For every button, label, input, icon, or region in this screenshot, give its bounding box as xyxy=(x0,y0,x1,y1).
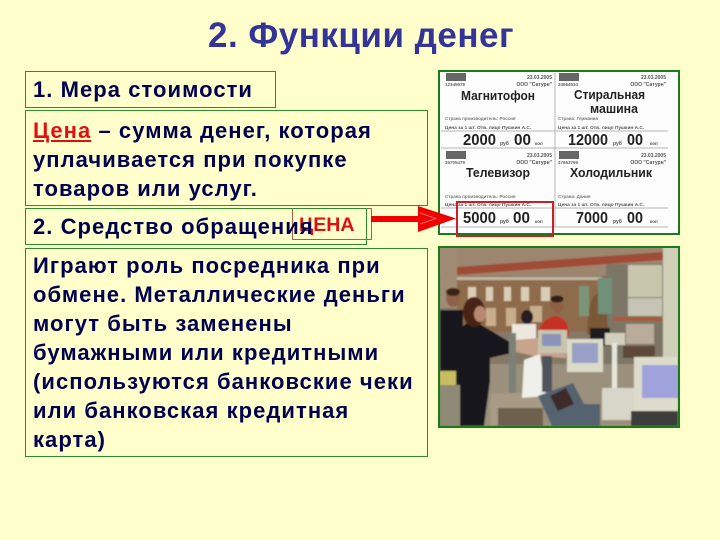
price tag: washing machine: 12000 xyxy=(568,132,608,149)
price tag: television xyxy=(445,151,553,227)
panel: store checkout photo xyxy=(438,246,680,428)
price tag: refrigerator: 00 xyxy=(627,210,643,227)
floor and counter xyxy=(484,364,678,426)
price tag: tape recorder: 23.03.2005 xyxy=(527,75,552,81)
arrow: to price xyxy=(371,206,456,232)
price tag: refrigerator: Страна: Дания xyxy=(558,194,591,199)
price tag: refrigerator: 47653765 xyxy=(558,160,579,165)
price tag: washing machine: коп xyxy=(650,141,658,146)
title: 2. Функции денег xyxy=(208,16,514,55)
price tag: tape recorder: ООО "Сатурн" xyxy=(516,82,553,88)
panel: medium of exchange description xyxy=(25,248,428,457)
price tag: tape recorder: Магнитофон xyxy=(461,88,535,103)
equipment xyxy=(598,278,612,314)
label: price tag word xyxy=(292,208,372,240)
price tag: tape recorder: 12345678 xyxy=(445,82,466,87)
price tag: washing machine: ООО "Сатурн" xyxy=(630,82,667,88)
price tag: tape recorder: Цена за 1 шт. Отв. лицо Пушкин А.С. xyxy=(445,125,531,131)
price tag: washing machine: 00 xyxy=(627,132,643,149)
price tag: tape recorder: руб xyxy=(500,140,509,147)
panel: medium of exchange description: могут быть заменены xyxy=(33,311,293,336)
monitors xyxy=(538,330,567,353)
price tag: washing machine xyxy=(558,73,667,149)
price tag: television: Страна производитель: Россия xyxy=(445,194,516,199)
price tag: washing machine: Стиральная xyxy=(574,87,645,102)
price tag: refrigerator: коп xyxy=(650,219,658,224)
price tag: tape recorder: 00 xyxy=(514,132,531,149)
label: price tag word: ЦЕНА xyxy=(299,214,354,236)
panel: medium of exchange description: Играют роль посредника при xyxy=(33,253,381,278)
price tag: refrigerator: ООО "Сатурн" xyxy=(630,160,667,166)
highlight: price rectangle xyxy=(456,201,554,237)
back wall xyxy=(606,264,663,348)
panel: medium of exchange heading xyxy=(25,208,367,245)
price tag: television: Телевизор xyxy=(466,165,530,180)
price tag: washing machine: машина xyxy=(590,101,639,116)
price tag: tape recorder: 2000 xyxy=(463,132,496,149)
price tag: television: 23.03.2005 xyxy=(527,153,552,159)
price tag: washing machine: руб xyxy=(613,140,622,147)
price tag: refrigerator: 7000 xyxy=(576,210,608,227)
price tag: refrigerator: 23.03.2005 xyxy=(641,153,666,159)
price tag: washing machine: Цена за 1 шт. Отв. лицо Пушкин А.С. xyxy=(558,125,644,131)
price tag: television: 5000 xyxy=(463,210,496,227)
panel: price definition xyxy=(25,110,428,206)
price tag: washing machine: Страна: Германия xyxy=(558,116,598,121)
panel: price tags image xyxy=(438,70,680,235)
panel: price definition: Цена – сумма денег, которая xyxy=(33,118,372,143)
price tag: television: руб xyxy=(500,218,509,225)
panel: medium of exchange description: карта) xyxy=(33,427,106,452)
price tag: refrigerator: Холодильник xyxy=(570,165,652,180)
panel: medium of exchange description: или банковская кредитная xyxy=(33,398,349,423)
panel: measure of value heading xyxy=(25,71,276,108)
price tag: television: коп xyxy=(535,219,543,224)
panel: medium of exchange description: обмене. Металлические деньги xyxy=(33,282,406,307)
panel: price definition: уплачивается при покупке xyxy=(33,147,348,172)
price tag: refrigerator: руб xyxy=(613,218,622,225)
price tag: television: Цена за 1 шт. Отв. лицо Пушкин А.С. xyxy=(445,202,531,208)
people xyxy=(440,310,463,372)
price tag: refrigerator xyxy=(558,151,667,227)
price tag: refrigerator: Цена за 1 шт. Отв. лицо Пушкин А.С. xyxy=(558,202,644,208)
price tag: washing machine: 34564534 xyxy=(558,82,579,87)
price tag: washing machine: 23.03.2005 xyxy=(641,75,666,81)
panel: medium of exchange heading: 2. Средство обращения xyxy=(33,214,314,239)
panel: price definition: товаров или услуг. xyxy=(33,176,258,201)
shelves xyxy=(457,276,607,332)
price tag: tape recorder: коп xyxy=(535,141,543,146)
price tag: tape recorder: Страна производитель: Россия xyxy=(445,116,516,121)
price tag: television: 35705479 xyxy=(445,160,466,165)
panel: medium of exchange description: (используются банковские чеки xyxy=(33,369,414,394)
price tag: television: ООО "Сатурн" xyxy=(516,160,553,166)
panel: medium of exchange description: бумажными или кредитными xyxy=(33,340,379,365)
price tag: tape recorder xyxy=(445,73,553,149)
price tag: television: 00 xyxy=(513,210,530,227)
ceiling xyxy=(440,248,663,276)
panel: measure of value heading: 1. Мера стоимости xyxy=(33,77,253,102)
